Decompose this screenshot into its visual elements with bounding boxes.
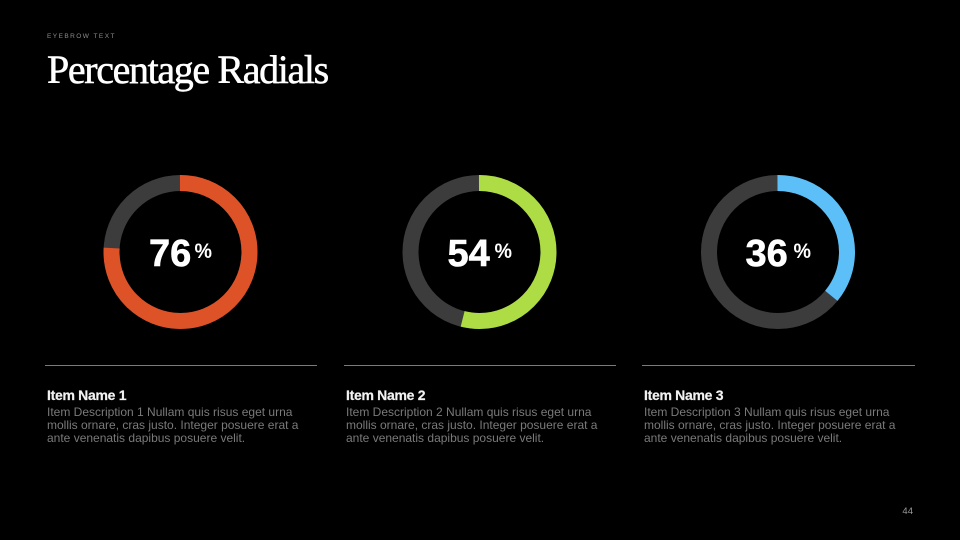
- item 2 description: Item Description 2 Nullam quis risus eget urna: [346, 404, 591, 418]
- item 1 text: [47, 387, 298, 445]
- eyebrow text: EYEBROW TEXT: [47, 33, 116, 40]
- item 2 text: [346, 387, 598, 445]
- item 3 description: ante venenatis dapibus posuere velit.: [644, 431, 842, 445]
- page number: 44: [902, 506, 913, 517]
- radial chart: 36%: %: [794, 240, 811, 263]
- radial chart: 54%: [410, 183, 548, 321]
- radial chart: 54%: 54: [448, 233, 490, 275]
- item 3 description: Item Description 3 Nullam quis risus eget urna: [644, 404, 889, 418]
- item 3 description: mollis ornare, cras justo. Integer posuere erat a: [644, 418, 895, 432]
- title: Percentage Radials: [47, 46, 328, 92]
- radial chart: 76%: 76: [149, 233, 191, 275]
- radial chart: 76%: %: [194, 240, 212, 263]
- item 2 description: [346, 404, 598, 445]
- item 2 name: Item Name 2: [346, 387, 425, 403]
- radial chart: 36%: 36: [746, 233, 788, 275]
- item 1 description: Item Description 1 Nullam quis risus eget urna: [47, 404, 292, 418]
- radial chart: 54%: %: [494, 240, 512, 263]
- item 2 description: ante venenatis dapibus posuere velit.: [346, 431, 544, 445]
- item 1 description: ante venenatis dapibus posuere velit.: [47, 431, 245, 445]
- item 1 description: [47, 404, 298, 445]
- item 2 description: mollis ornare, cras justo. Integer posuere erat a: [346, 418, 597, 432]
- radial chart: 76%: [112, 183, 250, 321]
- item 3 name: Item Name 3: [644, 387, 723, 403]
- radial chart: 36%: [709, 183, 847, 321]
- item 1 name: Item Name 1: [47, 387, 126, 403]
- item 3 text: [644, 387, 896, 445]
- item 1 description: mollis ornare, cras justo. Integer posuere erat a: [47, 418, 298, 432]
- item 3 description: [644, 404, 896, 445]
